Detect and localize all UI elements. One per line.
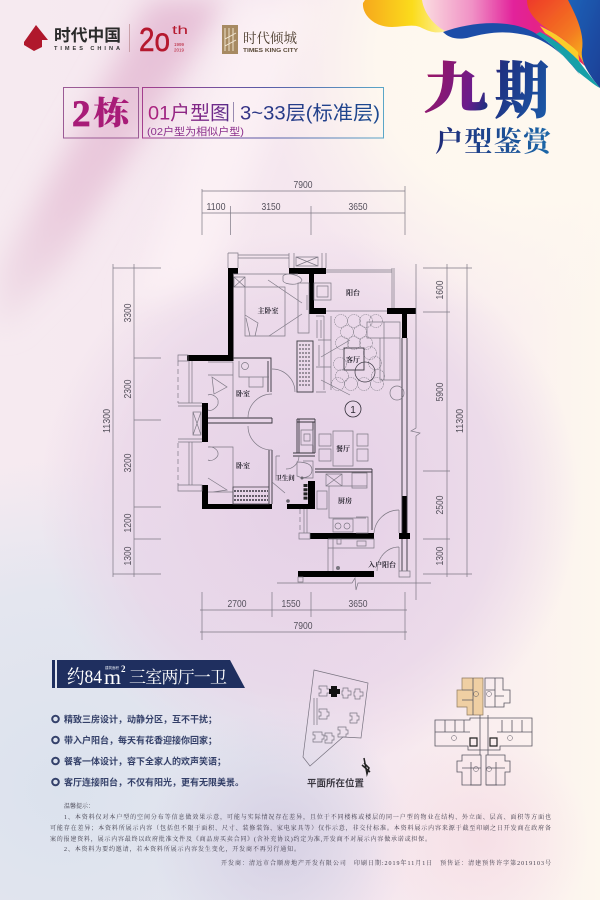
partition and outer lines bbox=[208, 338, 407, 571]
point 2: 带入户阳台，每天有花香迎接你回家； bbox=[64, 734, 217, 746]
dimensions: bottom: 2700 bbox=[228, 598, 247, 610]
building number box bbox=[64, 88, 138, 138]
area banner: 约84 bbox=[67, 666, 102, 688]
dimensions: top: 3150 bbox=[262, 201, 281, 213]
dimensions: left: 1200 bbox=[122, 513, 134, 532]
dimensions: bottom: 7900 bbox=[294, 620, 313, 632]
unit type heading box: 01户型图 bbox=[148, 102, 230, 124]
title: phase nine: 期 bbox=[495, 59, 549, 126]
disclaimer notes: 2、本资料为要约邀请，若本资料所展示内容发生变化，开发商不再另行通知。 bbox=[64, 845, 300, 853]
subtitle: 户型鉴赏 bbox=[435, 126, 554, 158]
point 1: 精致三房设计，动静分区，互不干扰； bbox=[64, 714, 217, 726]
disclaimer notes bbox=[50, 802, 551, 867]
building number box: 2 bbox=[72, 94, 90, 135]
logo: Times China bbox=[24, 24, 130, 52]
balcony washer bbox=[314, 283, 361, 300]
site plan bbox=[303, 670, 370, 790]
entrance balcony: 入户阳台 bbox=[368, 560, 397, 569]
dimensions: left: 3200 bbox=[122, 453, 134, 472]
upper bedroom furniture bbox=[208, 361, 269, 419]
dimensions: left: 11300 bbox=[101, 409, 113, 433]
entrance balcony bbox=[298, 539, 397, 582]
dimensions: right bbox=[423, 264, 472, 577]
area banner: 建筑面积 bbox=[105, 665, 119, 670]
dining table: 餐厅 bbox=[336, 444, 350, 453]
dining table bbox=[319, 431, 368, 466]
area banner bbox=[52, 660, 245, 689]
master bedroom furniture bbox=[233, 274, 313, 392]
upper bedroom furniture: 卧室 bbox=[236, 389, 250, 398]
unit marker: 1 bbox=[350, 405, 356, 416]
site plan caption: 平面所在位置 bbox=[307, 778, 364, 790]
dimensions: right: 5900 bbox=[434, 382, 446, 402]
title: phase nine bbox=[424, 59, 549, 126]
disclaimer notes: 温馨提示： bbox=[64, 802, 94, 810]
highlighted unit bbox=[457, 678, 483, 715]
unit type heading box bbox=[142, 88, 384, 138]
logo: 20th anniversary: 2o bbox=[139, 21, 170, 58]
area banner: 2 bbox=[121, 664, 126, 674]
point 4: 客厅连接阳台，不仅有阳光，更有无限美景。 bbox=[64, 776, 244, 788]
logo: Times King City: TIMES KING CITY bbox=[243, 48, 299, 54]
logo: 20th anniversary: 2019 bbox=[174, 48, 185, 52]
bathroom fixtures bbox=[275, 430, 313, 503]
dimensions: right: 11300 bbox=[454, 409, 466, 433]
disclaimer notes: 开发商：清远市合顺房地产开发有限公司 印刷日期:2019年11月1日 预售证：清建预售许字第2019103号 bbox=[221, 859, 551, 867]
window rails bbox=[178, 355, 188, 361]
load-bearing walls bbox=[187, 268, 416, 577]
dimensions: bottom bbox=[200, 592, 407, 640]
title: phase nine: 九 bbox=[424, 59, 488, 119]
dimensions: right: 1300 bbox=[434, 546, 446, 566]
selling points list bbox=[52, 714, 244, 788]
dimensions: right: 2500 bbox=[434, 495, 446, 514]
logo: 20th anniversary: th bbox=[172, 23, 188, 37]
living room rug and sofa: 客厅 bbox=[346, 355, 360, 364]
disclaimer notes: 可能存在差异；本资料所展示内容（包括但不限于面积、尺寸、装修装饰、家电家具等）仅作示意，非交付标准。本资料展示内容来源于截至印刷之日开发商在政府备 bbox=[50, 824, 551, 832]
logo: Times King City bbox=[222, 25, 299, 54]
compass bbox=[362, 758, 370, 774]
unit type heading box: 3~33层(标准层) bbox=[240, 102, 380, 124]
bathroom fixtures: 卫生间 bbox=[275, 473, 295, 482]
dimensions: left bbox=[101, 264, 161, 577]
lower bedroom furniture: 卧室 bbox=[236, 461, 250, 470]
dimensions: left: 3300 bbox=[122, 303, 134, 322]
dimensions: top: 3650 bbox=[348, 201, 368, 213]
logo: Times King City: 时代倾城 bbox=[243, 31, 297, 46]
area banner: 三室两厅一卫 bbox=[129, 668, 227, 687]
color swirl top right bbox=[363, 0, 600, 88]
dimensions: left: 2300 bbox=[122, 379, 134, 398]
living room rug and sofa bbox=[316, 314, 404, 400]
dimensions: top: 1100 bbox=[206, 201, 226, 213]
point 3: 餐客一体设计，容下全家人的欢声笑语； bbox=[64, 756, 226, 768]
disclaimer notes: 案的报建资料，展示内容最终以政府批准文件及《商品房买卖合同》(含补充协议)约定为准,开发商不对展示内容做承诺或担保。 bbox=[50, 835, 431, 843]
unit type heading box: (02户型为相似户型) bbox=[147, 125, 244, 138]
dimensions: top bbox=[202, 179, 405, 235]
lower bedroom furniture bbox=[208, 447, 269, 504]
key plan bbox=[435, 678, 532, 785]
dimensions: right: 1600 bbox=[434, 280, 446, 300]
logo: 20th anniversary: 1999 bbox=[174, 42, 185, 47]
dimensions: bottom: 1550 bbox=[282, 598, 301, 610]
current building marker bbox=[329, 686, 340, 697]
master bedroom furniture: 主卧室 bbox=[258, 306, 278, 315]
logo: Times China: 时代中国 bbox=[54, 26, 121, 45]
floor plan bbox=[178, 253, 431, 600]
kitchen fixtures bbox=[317, 473, 368, 533]
kitchen fixtures: 厨房 bbox=[338, 496, 352, 505]
disclaimer notes: 1、本资料仅对本户型的空间分布等信息做效果示意，可能与实际情况存在差异，且位于不同楼栋或楼层的同一户型的物业在结构、外立面、层高、面积等方面也 bbox=[64, 813, 551, 821]
doors bbox=[248, 280, 399, 571]
balcony washer: 阳台 bbox=[346, 288, 361, 297]
dimensions: bottom: 3650 bbox=[348, 598, 368, 610]
unit marker bbox=[345, 401, 361, 417]
icon: red arrow mark bbox=[24, 25, 48, 51]
building number box: 栋 bbox=[93, 95, 133, 131]
logo: Times China: TIMES CHINA bbox=[54, 46, 120, 52]
dimensions: left: 1300 bbox=[122, 546, 134, 566]
area banner: m bbox=[104, 665, 121, 689]
dimensions: top: 7900 bbox=[294, 179, 313, 191]
